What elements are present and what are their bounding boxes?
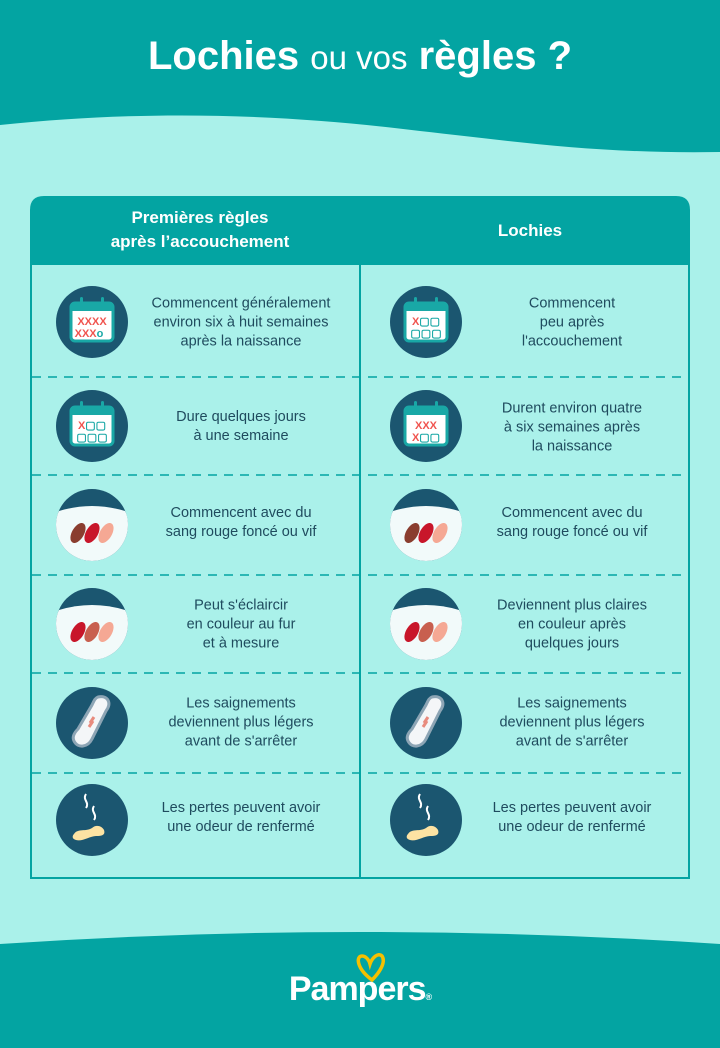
header: premières règles (111, 208, 290, 251)
text: row2 right: Durent environ quatre (502, 400, 642, 416)
text: row6 right: Les pertes peuvent avoir (493, 800, 651, 816)
icon: calendar many days: XXXo (75, 328, 104, 340)
logo: Pampers: Pampers® (289, 970, 431, 1008)
text: row6 left (162, 800, 320, 835)
text: row4 left: en couleur au fur (187, 616, 295, 632)
icon: calendar few days: ▢▢▢ (76, 432, 108, 444)
title: Lochies ou vos règles ? (148, 34, 572, 78)
text: row1 left: après la naissance (181, 334, 301, 350)
text: row2 left: à une semaine (193, 428, 289, 444)
text: row1 right: l'accouchement (522, 334, 622, 350)
icon: blood drops lighter (56, 588, 128, 660)
text: row3 right: Commencent avec du (501, 505, 643, 521)
text: row5 right (499, 696, 645, 750)
text: row3 right (497, 505, 648, 540)
header background wave (0, 0, 720, 152)
text: row2 right (502, 400, 642, 454)
text: row6 right: une odeur de renfermé (498, 819, 646, 835)
icon: blood drops dark right (390, 489, 462, 561)
text: row1 left (152, 296, 330, 350)
text: row6 right (493, 800, 652, 835)
text: row6 left: Les pertes peuvent avoir (162, 800, 320, 816)
text: row6 left: une odeur de renfermé (167, 819, 315, 835)
icon: blood drops dark (56, 489, 128, 561)
logo: Pampers (289, 953, 432, 1008)
text: row1 left: environ six à huit semaines (154, 314, 328, 330)
text: row4 right: Deviennent plus claires (497, 598, 647, 614)
text: row4 right: quelques jours (525, 636, 619, 652)
header: premières règles: Premières règles (131, 208, 269, 227)
icon: calendar starts soon: X▢▢ (412, 316, 440, 328)
text: row2 left: Dure quelques jours (176, 409, 306, 425)
icon: smell right (390, 784, 462, 856)
icon: calendar many days (56, 286, 128, 358)
icon: calendar starts soon: ▢▢▢ (410, 328, 442, 340)
text: row1 right (522, 296, 622, 350)
text: row5 right: avant de s'arrêter (516, 734, 628, 750)
text: row2 left (176, 409, 306, 444)
text: row5 left: avant de s'arrêter (185, 734, 297, 750)
text: row4 left: Peut s'éclaircir (194, 598, 288, 614)
text: row5 right: Les saignements (517, 696, 627, 712)
icon: calendar few days: X▢▢ (78, 420, 106, 432)
icon: calendar weeks: XXX (415, 420, 438, 432)
text: row3 left: Commencent avec du (170, 505, 312, 521)
text: row2 right: à six semaines après (504, 420, 640, 436)
icon: blood drops lighter right (390, 588, 462, 660)
text: row5 left: Les saignements (186, 696, 296, 712)
icon: smell (56, 784, 128, 856)
header: lochies: Lochies (498, 221, 562, 240)
text: row5 left: deviennent plus légers (168, 714, 314, 730)
text: row3 left: sang rouge foncé ou vif (166, 524, 316, 540)
text: row4 right: en couleur après (518, 616, 626, 632)
text: row4 left (187, 598, 296, 652)
text: row2 right: la naissance (532, 438, 612, 454)
table (30, 196, 690, 879)
icon: calendar starts soon (390, 286, 462, 358)
text: row3 left (166, 505, 316, 540)
icon: calendar many days: XXXX (77, 316, 107, 328)
text: row3 right: sang rouge foncé ou vif (497, 524, 647, 540)
icon: calendar weeks: X▢▢ (412, 432, 440, 444)
text: row1 right: Commencent (529, 296, 615, 312)
icon: calendar weeks (390, 390, 462, 462)
text: row5 right: deviennent plus légers (499, 714, 645, 730)
text: row1 left: Commencent généralement (152, 296, 330, 312)
icon: pad (56, 687, 128, 759)
text: row4 right (497, 598, 647, 652)
text: row5 left (168, 696, 314, 750)
text: row4 left: et à mesure (203, 636, 279, 652)
icon: pad right (390, 687, 462, 759)
text: row1 right: peu après (540, 314, 604, 330)
header: premières règles: après l’accouchement (111, 232, 289, 251)
icon: calendar few days (56, 390, 128, 462)
